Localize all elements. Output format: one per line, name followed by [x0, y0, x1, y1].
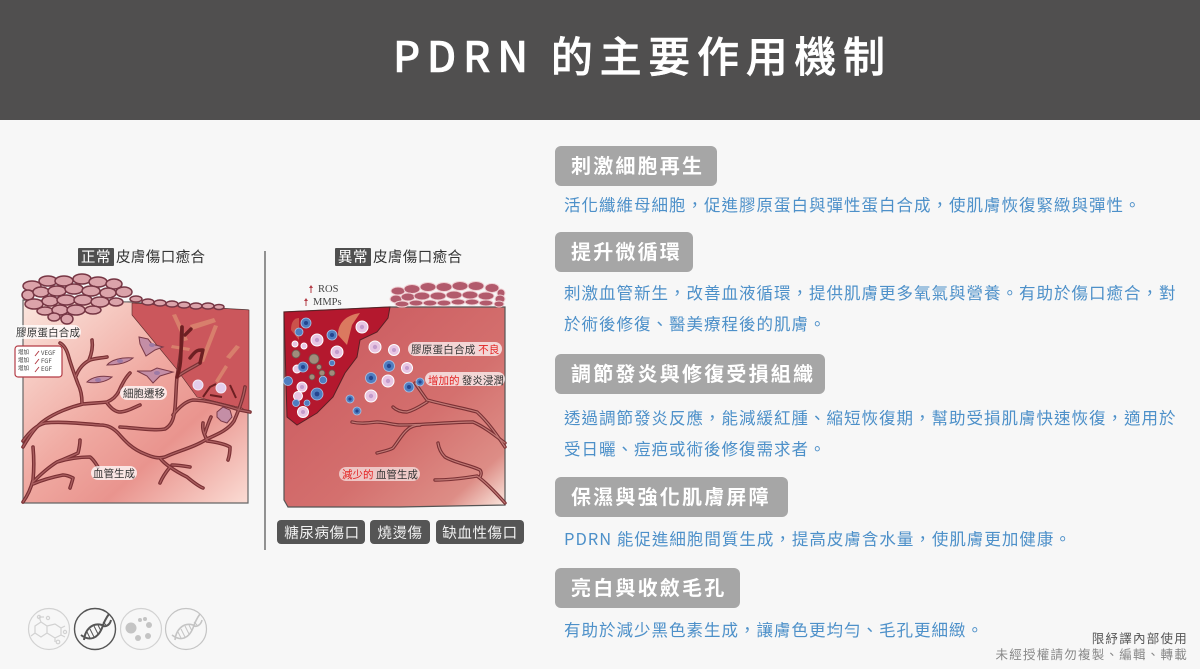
- section 4 text: PDRN 能促進細胞間質生成，提高皮膚含水量，使肌膚更加健康。: [564, 526, 1072, 550]
- cell labels: [15, 325, 167, 481]
- section 3 text: 受日曬、痘疤或術後修復需求者。: [564, 436, 826, 460]
- heading: abnormal: 皮膚傷口癒合: [373, 246, 462, 267]
- cell labels: 血管生成: [93, 466, 135, 481]
- icon: molecule: [28, 608, 70, 650]
- skin block: [284, 307, 505, 507]
- tags: wound types: 燒燙傷: [377, 522, 423, 543]
- labels: 減少的 血管生成: [342, 467, 418, 482]
- section 4 heading: [555, 477, 788, 517]
- callout: growth factors: [15, 346, 62, 377]
- icons: navigation dots: [28, 608, 206, 650]
- section 1 heading: [555, 146, 717, 186]
- header band: [0, 0, 1200, 120]
- white blood cells: [193, 380, 226, 393]
- section 5 text: 有助於減少黑色素生成，讓膚色更均勻、毛孔更細緻。: [564, 617, 984, 641]
- callout: growth factors: FGF: [41, 356, 52, 365]
- panel: normal wound healing: [15, 246, 250, 503]
- epidermis cells: [390, 282, 505, 307]
- inflammatory cells: [292, 321, 412, 418]
- section 2 heading: 提升微循環: [571, 236, 682, 265]
- callout: growth factors: 增加: [18, 364, 29, 372]
- section 2 heading: [555, 232, 693, 272]
- footnote: internal use: 限紓譯內部使用: [1092, 628, 1188, 647]
- section 3 heading: [555, 354, 825, 394]
- exudate highlights: [291, 313, 360, 345]
- section 5 heading: 亮白與收斂毛孔: [571, 572, 726, 601]
- blood vessels: [23, 327, 250, 502]
- section 1 text: 活化纖維母細胞，促進膠原蛋白與彈性蛋白合成，使肌膚恢復緊緻與彈性。: [564, 192, 1142, 216]
- cell labels: 膠原蛋白合成: [16, 325, 80, 340]
- section 2 text: 刺激血管新生，改善血液循環，提供肌膚更多氧氣與營養。有助於傷口癒合，對: [564, 280, 1176, 304]
- divider: [264, 251, 266, 550]
- wound bed: [284, 307, 390, 425]
- icon: DNA active: [74, 608, 116, 650]
- tags: wound types: 缺血性傷口: [442, 522, 518, 543]
- labels: 增加的 發炎浸潤: [428, 373, 504, 388]
- callout: growth factors: 增加: [18, 348, 29, 356]
- title: PDRN 的主要作用機制: [393, 24, 892, 85]
- ROS / MMPs labels: ROS: [318, 284, 339, 295]
- ROS / MMPs labels: MMPs: [313, 297, 342, 308]
- section 4 heading: 保濕與強化肌膚屏障: [571, 481, 771, 510]
- labels: 膠原蛋白合成 不良: [411, 342, 500, 357]
- epidermis cells: [22, 274, 224, 324]
- section 3 heading: 調節發炎與修復受損組織: [571, 358, 815, 387]
- tags: wound types: [277, 520, 524, 544]
- wound area: [132, 303, 249, 413]
- section 3 text: 透過調節發炎反應，能減緩紅腫、縮短恢復期，幫助受損肌膚快速恢復，適用於: [564, 405, 1176, 429]
- labels: [339, 342, 505, 482]
- panel: abnormal wound healing: [277, 246, 524, 544]
- fibres: [171, 314, 240, 383]
- callout: growth factors: EGF: [41, 364, 53, 373]
- skin block: [23, 300, 248, 503]
- heading: abnormal: 異常: [338, 246, 368, 267]
- section 2 text: [564, 280, 1176, 335]
- icon: particles: [120, 608, 162, 650]
- icon: DNA muted: [166, 608, 206, 650]
- migrating cells: [87, 337, 232, 423]
- heading: normal: 皮膚傷口癒合: [116, 246, 205, 267]
- ROS / MMPs labels: [304, 284, 342, 308]
- cell labels: 細胞遷移: [123, 386, 165, 401]
- section 1 heading: 刺激細胞再生: [571, 150, 704, 179]
- section 3 text: [564, 405, 1176, 460]
- section 2 text: 於術後修復、醫美療程後的肌膚。: [564, 311, 826, 335]
- vessels: [352, 383, 505, 503]
- heading: normal: 正常: [81, 246, 111, 267]
- callout: growth factors: VEGF: [41, 348, 56, 357]
- tags: wound types: 糖尿病傷口: [284, 522, 360, 543]
- footnote: copyright: 未經授權請勿複製、編輯、轉載: [995, 644, 1188, 663]
- callout: growth factors: 增加: [18, 356, 29, 364]
- section 5 heading: [555, 568, 740, 608]
